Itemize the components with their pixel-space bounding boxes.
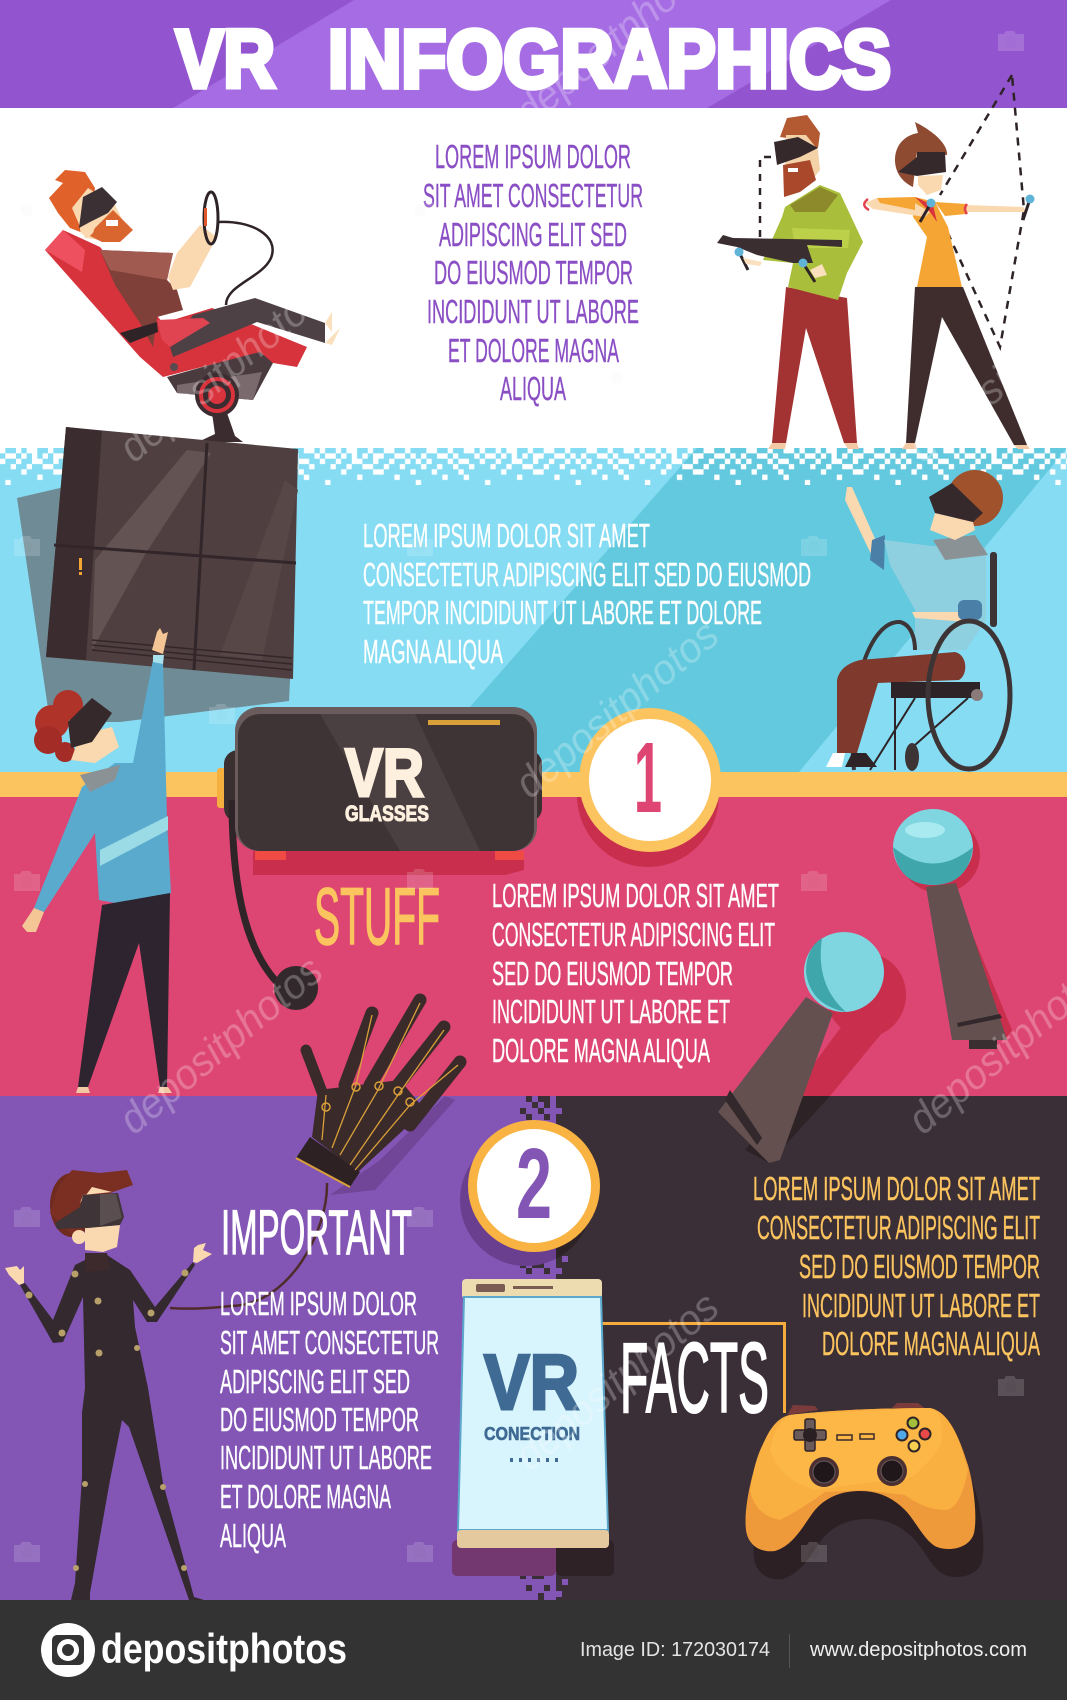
text block: intro: LOREM IPSUM DOLOR: [435, 138, 631, 175]
panel: dark section: [556, 1096, 1067, 1600]
illustration: smartphone: VR: [484, 1338, 579, 1426]
text block: purple section: DO EIUSMOD TEMPOR: [220, 1401, 419, 1438]
text block: pink section: SED DO EIUSMOD TEMPOR: [492, 955, 733, 992]
badge: number 2: 2: [516, 1128, 552, 1240]
text: FACTS: [620, 1322, 769, 1433]
watermarks: depositphotos: [110, 274, 331, 471]
illustration: console shadow: [17, 488, 292, 722]
text block: purple section: [220, 1285, 439, 1554]
text block: intro: DO EIUSMOD TEMPOR: [434, 254, 633, 291]
illustration: person in motion-capture suit: [5, 1170, 212, 1600]
text block: purple section: ADIPISCING ELIT SED: [220, 1363, 410, 1400]
text block: purple section: INCIDIDUNT UT LABORE: [220, 1439, 432, 1476]
text block: intro: ADIPISCING ELIT SED: [439, 216, 627, 253]
text block: purple section: LOREM IPSUM DOLOR: [220, 1285, 417, 1322]
frame: facts: [602, 1324, 784, 1413]
badge: number 1: 1: [634, 722, 662, 834]
footer: website: www.depositphotos.com: [809, 1639, 1027, 1661]
illustration: driver in racing seat: [45, 170, 340, 442]
text block: purple section: ET DOLORE MAGNA: [220, 1478, 391, 1515]
illustration: VR glasses: GLASSES: [345, 801, 429, 826]
icon: motion controller left: [718, 932, 906, 1163]
text block: pink section: [492, 877, 779, 1069]
panel: purple section: [0, 1096, 556, 1600]
icon: game controller: [746, 1403, 983, 1579]
watermarks: depositphotos: [110, 946, 331, 1143]
text block: pink section: CONSECTETUR ADIPISCING ELIT: [492, 916, 775, 953]
text block: dark section: [753, 1170, 1040, 1362]
text block: purple section: ALIQUA: [220, 1517, 286, 1554]
illustration: VR glasses: [217, 707, 542, 1010]
watermarks: depositphotos: [506, 610, 727, 807]
illustration: smartphone: CONECTION: [484, 1424, 580, 1444]
pixel strips between purple and dark: [520, 1096, 568, 1600]
illustration: woman with bow: [864, 75, 1034, 449]
panel: blue section background: [0, 448, 1067, 772]
heading: important: IMPORTANT: [221, 1198, 412, 1268]
panel: pink section: [0, 797, 1067, 1096]
text: STUFF: [314, 872, 440, 962]
background: white section: [0, 108, 1067, 448]
badge: number 2: [460, 1120, 600, 1266]
illustration: smartphone: [452, 1279, 614, 1576]
illustration: man with gun: [717, 115, 863, 449]
text block: intro: INCIDIDUNT UT LABORE: [427, 293, 639, 330]
icon: motion controller right: [893, 809, 1012, 1049]
illustration: console box: [46, 427, 298, 679]
panel: header band: [0, 0, 1067, 108]
text block: blue section: LOREM IPSUM DOLOR SIT AMET: [363, 517, 650, 554]
icon: VR glove: [296, 1000, 460, 1195]
text block: intro: ALIQUA: [500, 370, 566, 407]
text block: purple section: SIT AMET CONSECTETUR: [220, 1324, 439, 1361]
footer: image id: Image ID: 172030174: [580, 1639, 770, 1661]
footer logo: [41, 1623, 347, 1677]
text block: blue section: [363, 517, 811, 670]
text block: intro: [423, 138, 643, 407]
watermarks: [110, 0, 1067, 1479]
title: VR: [176, 14, 275, 105]
badge: number 1: [577, 708, 721, 867]
illustration: wheelchair user: [826, 470, 1010, 771]
watermarks: depositphotos: [506, 1282, 727, 1479]
text block: intro: SIT AMET CONSECTETUR: [423, 177, 643, 214]
title: INFOGRAPHICS: [328, 14, 891, 105]
text block: intro: ET DOLORE MAGNA: [448, 332, 619, 369]
panel: footer: [0, 1600, 1067, 1700]
illustration: person reaching up: [22, 628, 172, 1093]
text block: pink section: INCIDIDUNT UT LABORE ET: [492, 993, 730, 1030]
footer logo: depositphotos: [101, 1625, 347, 1672]
text block: pink section: DOLORE MAGNA ALIQUA: [492, 1032, 710, 1069]
illustration: VR glasses: VR: [345, 735, 424, 811]
panel: yellow stripe: [0, 772, 1067, 797]
illustration: motion capture cable: [170, 1183, 327, 1309]
text block: pink section: LOREM IPSUM DOLOR SIT AMET: [492, 877, 779, 914]
text block: blue section: MAGNA ALIQUA: [363, 633, 503, 670]
